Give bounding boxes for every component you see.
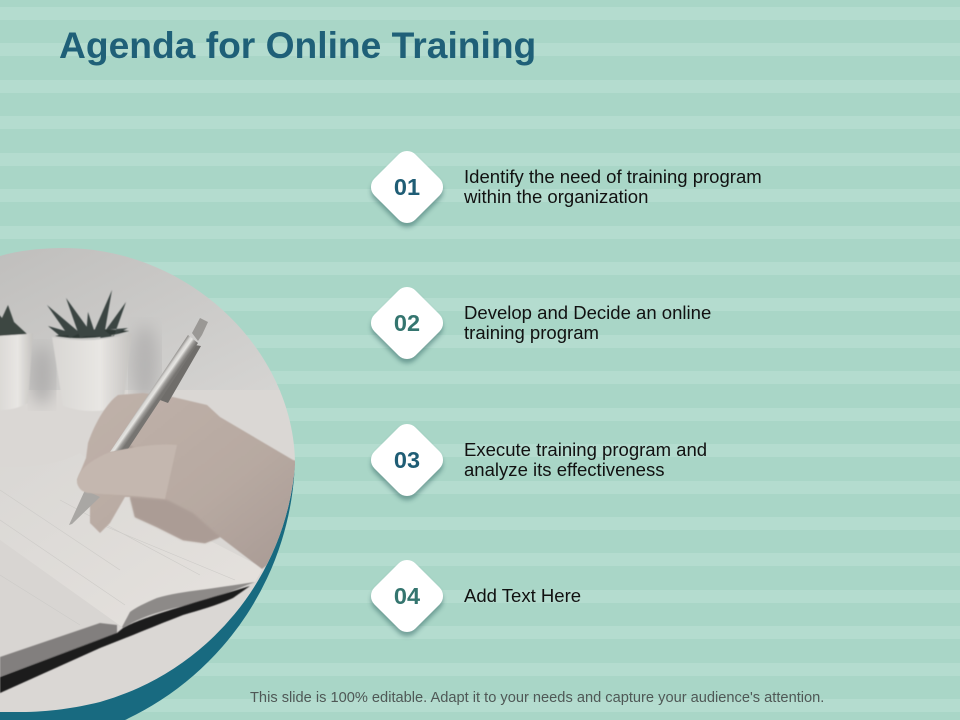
hand [77, 393, 300, 569]
diamond 03: 03 [394, 447, 420, 473]
agenda item 04 [368, 560, 581, 638]
agenda item 01 [368, 151, 762, 230]
diamond 01: 01 [394, 174, 420, 200]
text 03: Execute training program and [464, 439, 707, 460]
photo: hand writing in notebook [0, 248, 295, 720]
footer note: This slide is 100% editable. Adapt it to your needs and capture your audience's attention. [250, 690, 824, 706]
notebook [114, 548, 262, 626]
diamond 02: 02 [394, 310, 420, 336]
photo wall and table [0, 248, 280, 392]
diamond 04 [368, 560, 446, 638]
thumb [77, 445, 177, 499]
diamond 03 [369, 424, 445, 502]
text 03 [464, 439, 707, 480]
text 02: training program [464, 322, 599, 343]
text 04: Add Text Here [464, 585, 581, 606]
text 01: Identify the need of training program [464, 166, 762, 187]
plant pots [0, 290, 132, 411]
diamond 01 [368, 151, 446, 230]
text 03: analyze its effectiveness [464, 459, 665, 480]
text 01: within the organization [464, 186, 648, 207]
agenda item 03 [369, 424, 707, 502]
text 02 [464, 302, 711, 343]
text 02: Develop and Decide an online [464, 302, 711, 323]
title: Agenda for Online Training [59, 24, 536, 66]
text 01 [464, 166, 762, 207]
diamond 04: 04 [394, 583, 420, 609]
teal crescent [0, 460, 295, 720]
diamond 02 [369, 287, 445, 366]
agenda item 02 [369, 287, 711, 366]
pen [160, 345, 201, 403]
